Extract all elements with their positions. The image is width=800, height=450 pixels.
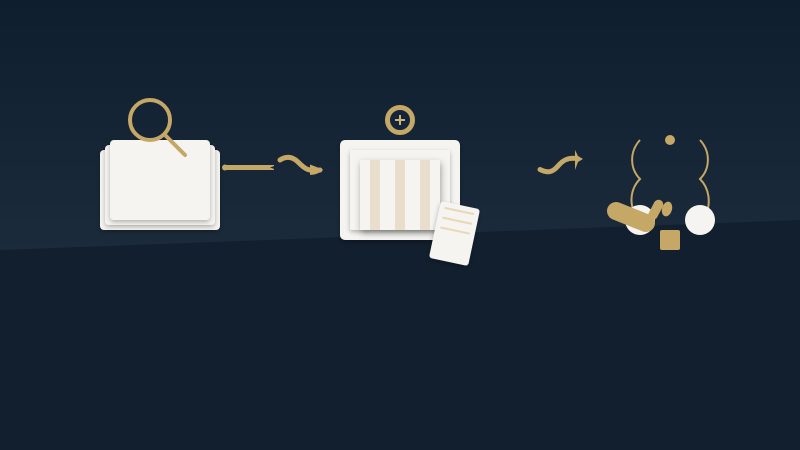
arrow: first wave [280,157,323,175]
icon: figure with balloons and gold shapes [616,135,715,250]
left curve [632,140,640,212]
right circle [685,205,715,235]
arrow: second wave [540,150,583,172]
outer frame [340,140,460,240]
gold bar [616,211,646,223]
gold ellipse small [660,200,674,218]
gold square [660,230,680,250]
right curve [700,140,709,212]
icon: stacked documents with magnifier [100,100,220,230]
striped sheet [360,160,440,230]
note card [429,201,480,266]
magnifier [130,100,185,155]
top dot [665,135,675,145]
inner frame [350,150,450,230]
document stack [100,140,220,230]
gold ellipse large [653,204,658,215]
plus badge [388,108,412,132]
left circle [625,205,655,235]
icon: framed striped panel with plus badge [340,108,480,266]
arrow: connector line [222,164,275,170]
